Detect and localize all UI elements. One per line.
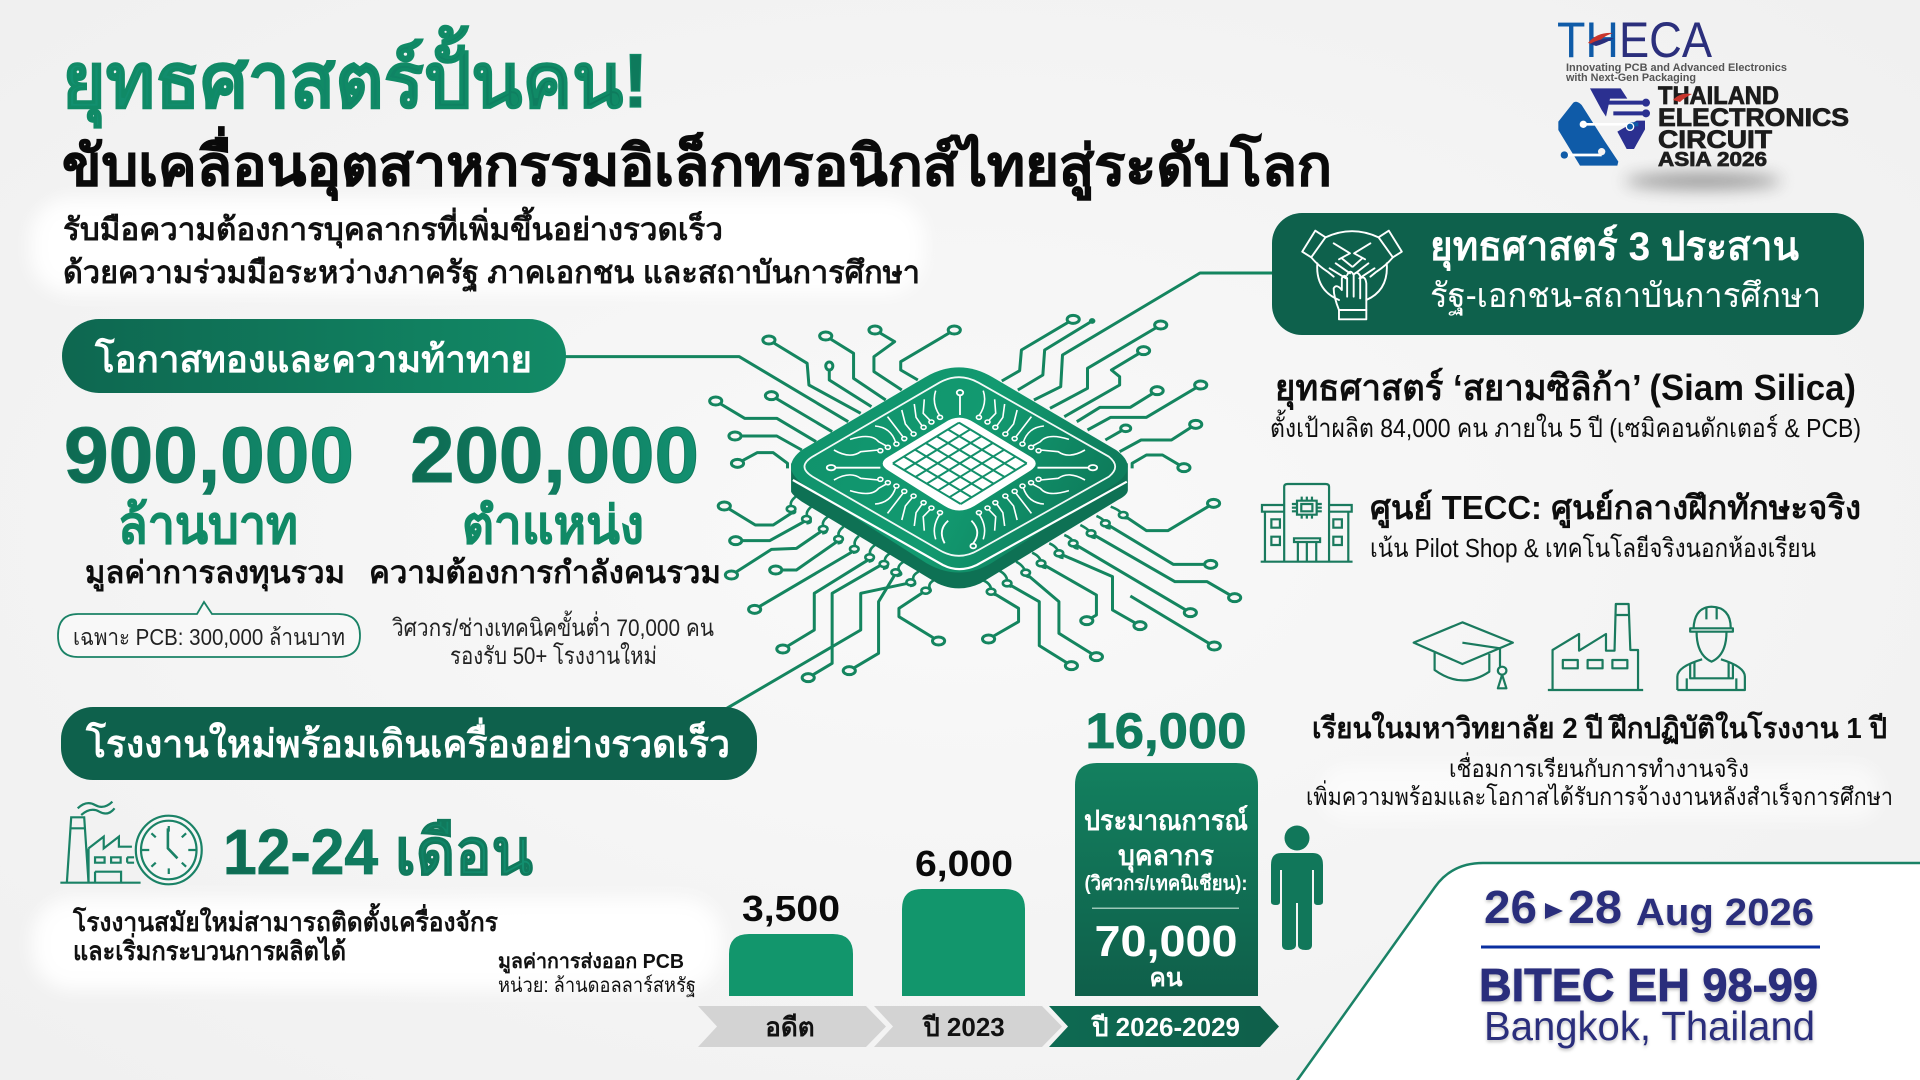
logo tagline: Innovating PCB and Advanced Electronics	[1566, 62, 1787, 74]
icon: graduation cap	[1414, 622, 1513, 688]
chip legs	[787, 497, 1128, 595]
chart label	[498, 951, 696, 997]
timeline chevrons	[698, 1006, 1279, 1047]
white edge line	[793, 480, 1127, 569]
title	[62, 25, 1332, 201]
bar: past: 3,500	[742, 888, 840, 929]
logo event name	[1658, 82, 1849, 171]
stat: workforce	[369, 410, 721, 670]
stat: workforce: 200,000	[410, 410, 699, 499]
chip surface traces	[827, 390, 1097, 548]
panel: three-way strategy	[1272, 213, 1864, 335]
event date: Aug 2026	[1636, 892, 1814, 934]
section pill: golden opportunities	[62, 319, 566, 393]
icon: joined hands	[1302, 231, 1402, 319]
logo: THECA and TECA	[1557, 12, 1849, 189]
stat: investment: ล้านบาท	[118, 497, 298, 555]
logo event name: ELECTRONICS	[1658, 104, 1849, 132]
bar: 2026-2029: 16,000	[1086, 703, 1246, 759]
event venue	[1479, 959, 1818, 1049]
bar: 2023: 6,000	[915, 843, 1013, 884]
logo tagline	[1565, 62, 1787, 84]
subtitle: รับมือความต้องการบุคลากรที่เพิ่มขึ้นอย่างรวดเร็ว	[63, 206, 723, 249]
chip with circuit traces	[565, 273, 1272, 708]
panel: three-way strategy: ยุทธศาสตร์ 3 ประสาน	[1430, 224, 1799, 272]
stat: workforce: ความต้องการกำลังคนรวม	[369, 555, 721, 590]
event date	[1484, 881, 1814, 934]
icon: TECC building	[1261, 484, 1353, 562]
logo event name: THAILAND	[1658, 82, 1779, 110]
stat: workforce: ตำแหน่ง	[462, 497, 644, 555]
section pill: new factories	[61, 707, 757, 780]
text: work-study model: เชื่อมการเรียนกับการทำงานจริง	[1449, 752, 1749, 783]
timeline chevrons: ปี 2023	[922, 1012, 1005, 1042]
text: TECC	[1370, 489, 1861, 563]
text: TECC: ศูนย์ TECC: ศูนย์กลางฝึกทักษะจริง	[1370, 489, 1861, 529]
logo wordmark THECA: TH	[1557, 12, 1619, 68]
section pill: new factories: โรงงานใหม่พร้อมเดินเครื่องอย่างรวดเร็ว	[85, 717, 730, 766]
timeline chevrons: อดีต	[765, 1012, 815, 1042]
logo mark	[1558, 88, 1650, 166]
logo event name: ASIA 2026	[1658, 149, 1767, 171]
stat: workforce: วิศวกร/ช่างเทคนิคขั้นต่ำ 70,000 คน	[392, 610, 714, 642]
panel: three-way strategy: รัฐ-เอกชน-สถาบันการศึกษา	[1430, 277, 1821, 316]
timeline chevrons: ปี 2026-2029	[1091, 1012, 1240, 1042]
bar: 2026-2029: ประมาณการณ์	[1084, 805, 1248, 836]
text: Siam Silica: ตั้งเป้าผลิต 84,000 คน ภายใน 5 ปี (เซมิคอนดักเตอร์ & PCB)	[1270, 409, 1861, 443]
bar: 2026-2029	[1075, 703, 1258, 996]
PCB callout	[58, 602, 360, 657]
icon: worker	[1677, 607, 1745, 690]
section pill: golden opportunities: โอกาสทองและความท้าทาย	[94, 337, 532, 380]
icon: factory	[1548, 604, 1643, 690]
inner outline	[804, 377, 1115, 556]
text: work-study model	[1306, 710, 1893, 811]
icon: person	[1271, 826, 1323, 950]
chip body	[791, 463, 1128, 588]
stat: investment: มูลค่าการลงทุนรวม	[85, 555, 345, 592]
text: factory description: และเริ่มกระบวนการผลิตได้	[73, 932, 346, 966]
text: work-study model: เรียนในมหาวิทยาลัย 2 ปี ฝึกปฏิบัติในโรงงาน 1 ปี	[1312, 710, 1887, 745]
stat: 12-24 months: 12-24 เดือน	[223, 816, 533, 888]
stat: workforce: รองรับ 50+ โรงงานใหม่	[450, 642, 657, 670]
text: factory description: โรงงานสมัยใหม่สามารถติดตั้งเครื่องจักร	[72, 902, 498, 937]
subtitle	[63, 206, 920, 293]
icon: factory and clock	[60, 802, 202, 884]
logo event name: CIRCUIT	[1658, 126, 1772, 154]
bar: 2026-2029: 70,000	[1094, 917, 1238, 966]
bar: 2023	[902, 843, 1025, 996]
bar: 2026-2029: บุคลากร	[1118, 840, 1214, 873]
soft white blobs behind text	[30, 198, 1880, 990]
text: Siam Silica: ยุทธศาสตร์ ‘สยามซิลิก้า’ (Siam Silica)	[1275, 367, 1856, 411]
chart label: หน่วย: ล้านดอลลาร์สหรัฐ	[498, 974, 696, 997]
panel: event details	[1296, 863, 1920, 1080]
logo tagline: with Next-Gen Packaging	[1565, 72, 1696, 84]
event venue: Bangkok, Thailand	[1484, 1003, 1815, 1049]
bar: 2026-2029: คน	[1150, 964, 1182, 992]
logo flag swoosh	[1673, 94, 1692, 102]
bar: past	[729, 888, 853, 996]
bar: 2026-2029: (วิศวกร/เทคนิเชียน):	[1084, 872, 1248, 895]
bar chart	[698, 703, 1279, 1047]
text: Siam Silica	[1270, 367, 1861, 443]
text: TECC: เน้น Pilot Shop & เทคโนโลยีจริงนอกห้องเรียน	[1370, 533, 1816, 563]
PCB callout: เฉพาะ PCB: 300,000 ล้านบาท	[73, 624, 345, 650]
text: factory description	[72, 902, 498, 966]
stat: investment	[58, 410, 360, 657]
chip top surface	[791, 367, 1128, 572]
circuit traces	[565, 273, 1272, 708]
chart label: มูลค่าการส่งออก PCB	[498, 951, 684, 975]
stat: investment: 900,000	[64, 410, 354, 499]
logo wordmark THECA	[1557, 12, 1713, 68]
heading: black title: ขับเคลื่อนอุตสาหกรรมอิเล็กทรอนิกส์ไทยสู่ระดับโลก	[62, 126, 1332, 201]
logo wordmark THECA: ECA	[1619, 12, 1713, 68]
heading: green title: ยุทธศาสตร์ปั้นคน!	[62, 25, 648, 129]
event date: 26	[1484, 881, 1537, 933]
logo shadow	[1625, 173, 1781, 189]
chip die	[883, 418, 1036, 510]
subtitle: ด้วยความร่วมมือระหว่างภาครัฐ ภาคเอกชน และสถาบันการศึกษา	[63, 255, 920, 293]
trace end pads	[710, 315, 1241, 682]
event venue: BITEC EH 98-99	[1479, 959, 1818, 1011]
event date: 28	[1568, 881, 1622, 933]
